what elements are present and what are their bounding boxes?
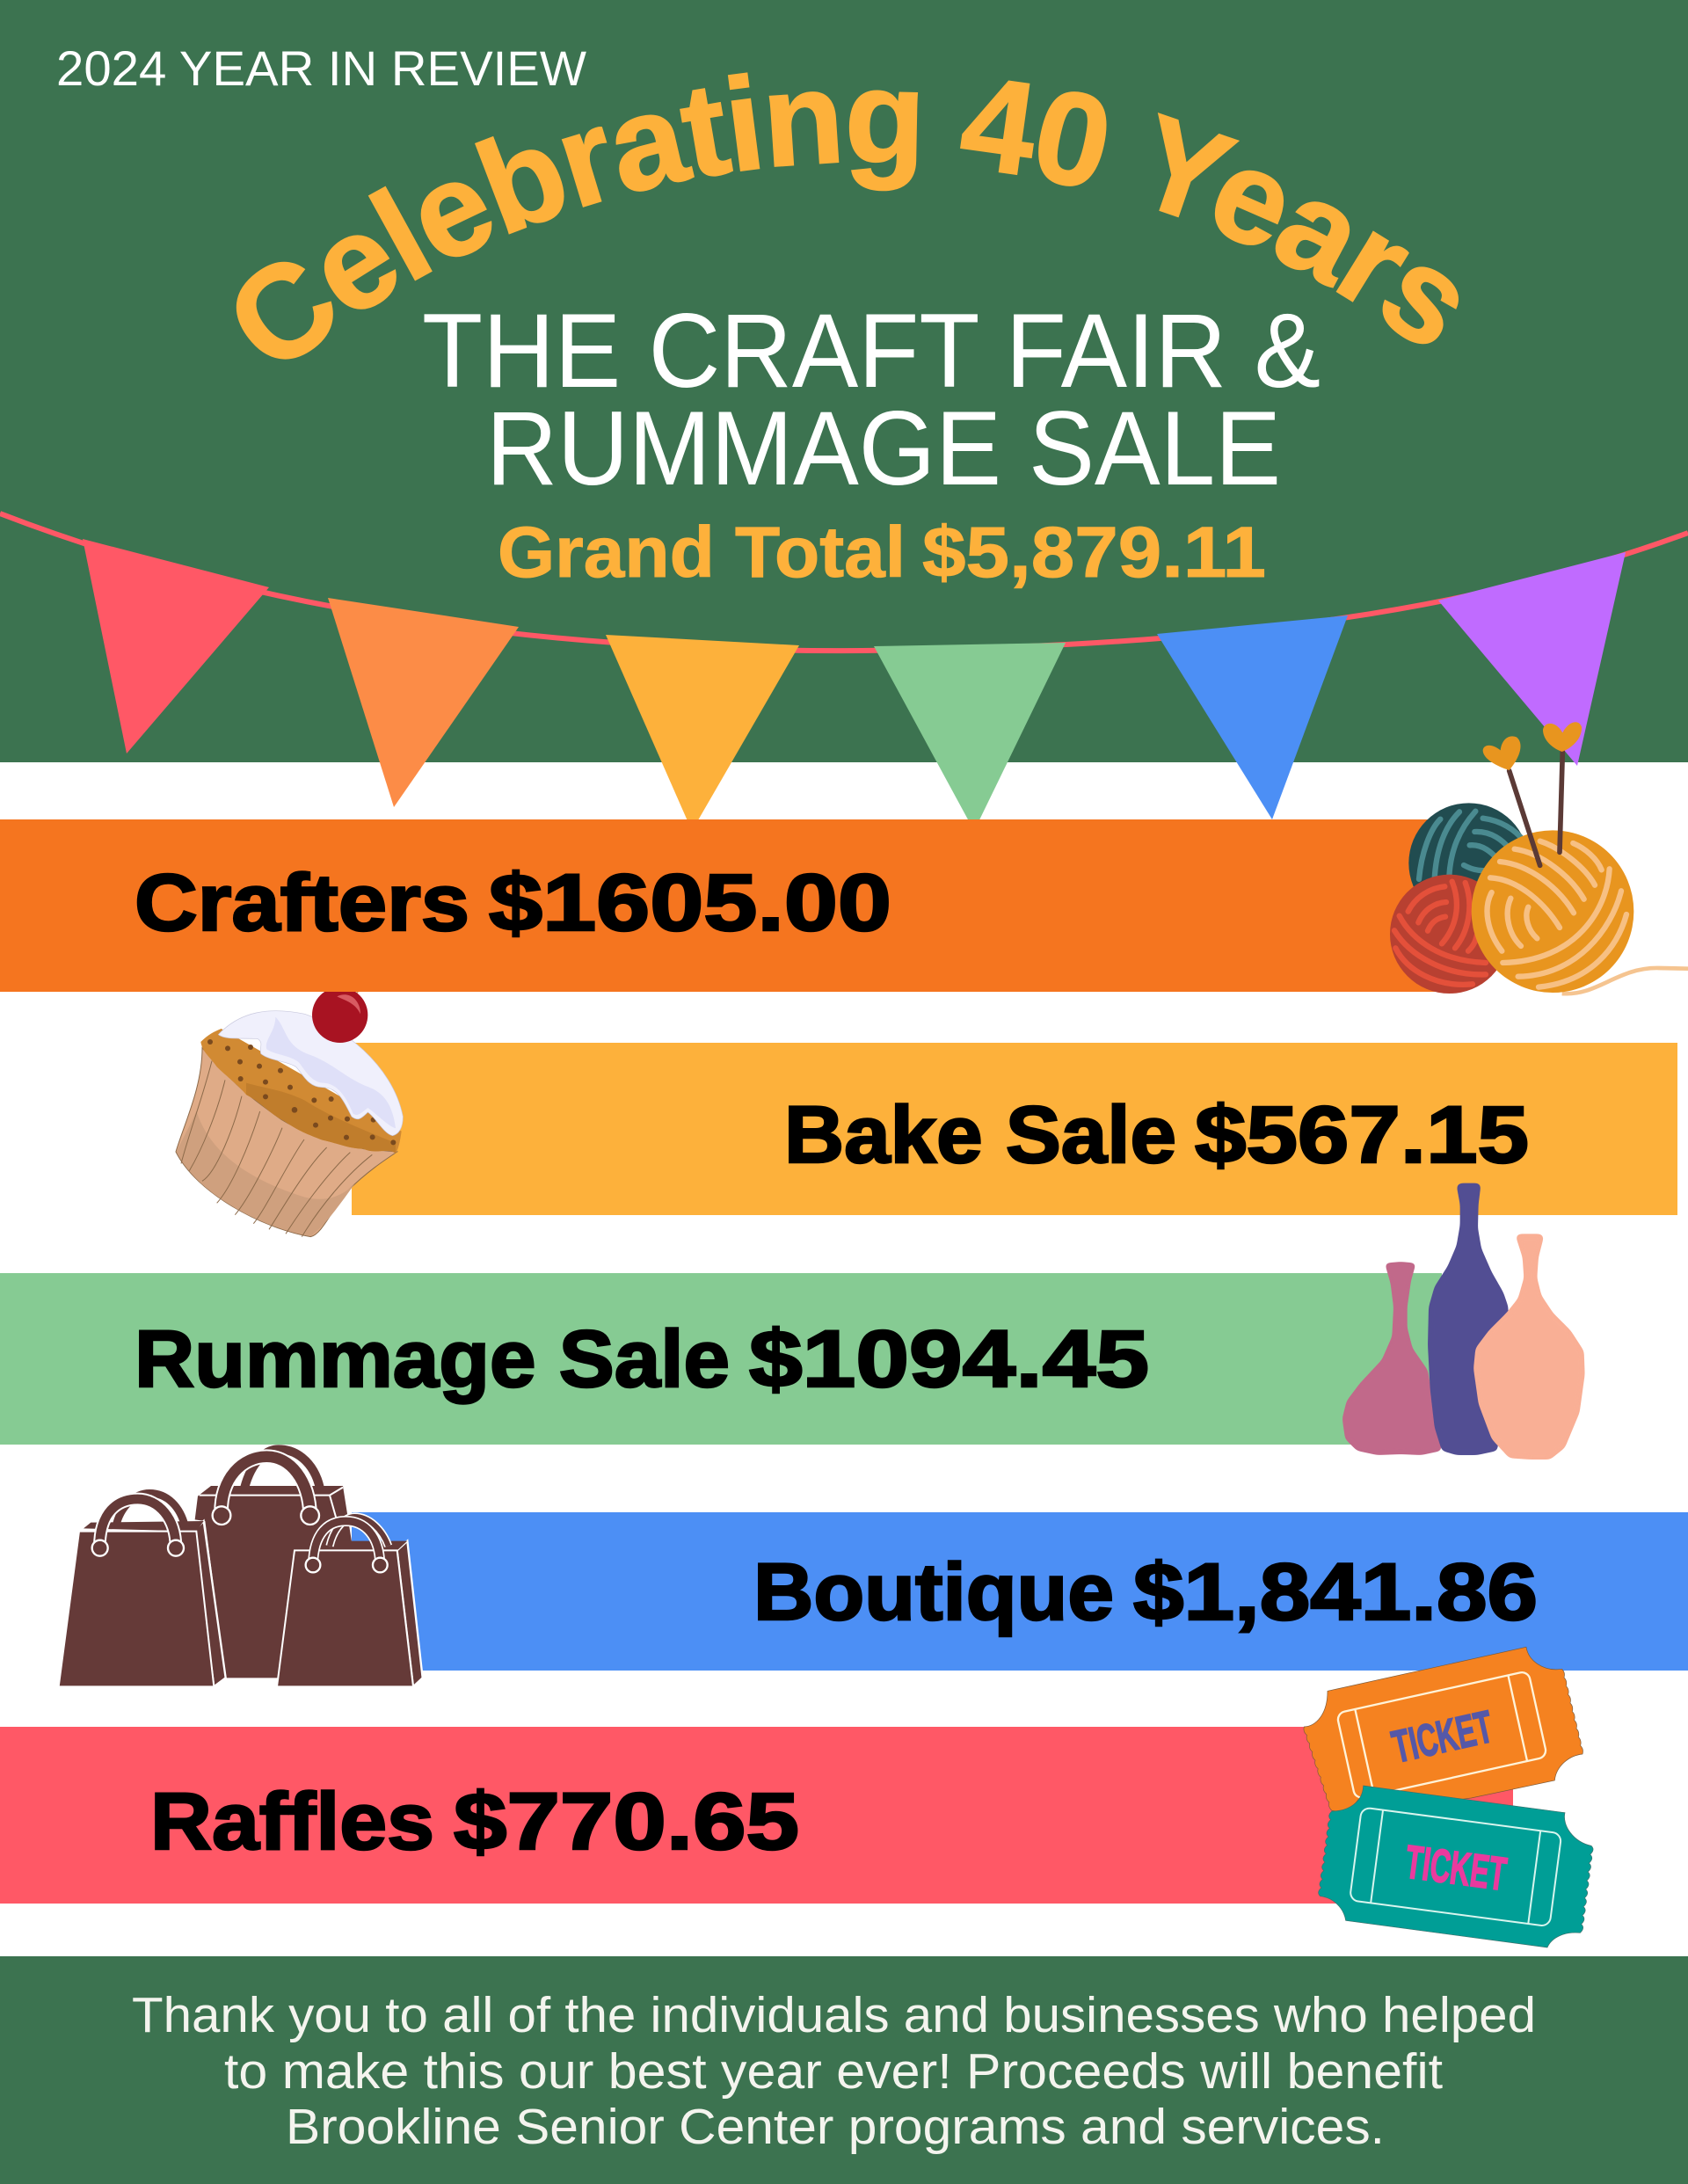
label: rummage sale: Rummage Sale xyxy=(135,1314,730,1404)
purple bottle xyxy=(1428,1183,1509,1455)
cupcake wrapper xyxy=(176,1048,397,1237)
title: craft fair and rummage sale xyxy=(422,292,1321,507)
label: raffles: $770.65 xyxy=(454,1777,799,1867)
peach vase xyxy=(1473,1234,1585,1460)
label: rummage sale xyxy=(135,1314,1149,1404)
text: grand total xyxy=(498,513,1266,593)
label: rummage sale: $1094.45 xyxy=(749,1314,1149,1404)
text: thank you message: to make this our best year ever! Proceeds will benefit xyxy=(224,2043,1443,2100)
teal ticket xyxy=(1319,1786,1593,1947)
title: celebrating 40 years: Celebrating 40 Years xyxy=(236,72,1459,360)
knitting needles xyxy=(1510,752,1562,865)
icon: yarn balls xyxy=(1390,722,1688,994)
flag: blue xyxy=(1157,615,1348,819)
text: thank you message xyxy=(132,1987,1536,2155)
label: raffles xyxy=(150,1777,799,1867)
label: crafters xyxy=(135,858,891,948)
left bag xyxy=(59,1493,226,1686)
text: year in review: 2024 YEAR IN REVIEW xyxy=(56,40,586,96)
bar: boutique xyxy=(352,1512,1688,1671)
label: boutique: $1,841.86 xyxy=(1133,1547,1538,1637)
flag: purple xyxy=(1438,552,1626,766)
yarn tail xyxy=(1562,968,1688,994)
ticket label: TICKET xyxy=(1402,1836,1510,1901)
label: bake sale: $567.15 xyxy=(1195,1090,1529,1180)
bar: rummage sale xyxy=(0,1273,1442,1445)
icon: shopping bags xyxy=(59,1449,423,1686)
cherry xyxy=(312,987,367,1043)
flag: yellow xyxy=(606,635,799,831)
label: crafters: Crafters xyxy=(135,858,469,948)
panel: footer background xyxy=(0,1956,1688,2184)
label: boutique xyxy=(753,1547,1538,1637)
label: bake sale: Bake Sale xyxy=(784,1090,1176,1180)
text: grand total: $5,879.11 xyxy=(922,513,1266,593)
bar: crafters xyxy=(0,819,1459,992)
orange ticket xyxy=(1304,1647,1582,1811)
panel: header background xyxy=(0,0,1688,762)
right bag xyxy=(277,1517,423,1686)
icon: cupcake xyxy=(176,987,403,1237)
label: bake sale xyxy=(784,1090,1529,1180)
flag: orange xyxy=(328,598,519,807)
text: thank you message: Thank you to all of the individuals and businesses who helped xyxy=(132,1987,1536,2043)
bar: raffles xyxy=(0,1727,1513,1904)
icing xyxy=(218,1011,403,1136)
pink vase xyxy=(1342,1262,1442,1455)
bar: bake sale xyxy=(352,1043,1677,1215)
label: crafters: $1605.00 xyxy=(489,858,891,948)
needle hearts xyxy=(1483,722,1582,770)
text: thank you message: Brookline Senior Center programs and services. xyxy=(286,2099,1385,2155)
red yarn ball xyxy=(1390,875,1509,994)
orange yarn ball xyxy=(1472,830,1633,993)
bunting banner xyxy=(0,513,1688,831)
flag: red xyxy=(83,539,269,753)
ticket label: TICKET xyxy=(1387,1700,1497,1773)
icon: tickets xyxy=(1304,1647,1593,1947)
label: boutique: Boutique xyxy=(753,1547,1114,1637)
muffin top xyxy=(200,1029,402,1154)
title: craft fair and rummage sale: THE CRAFT FAIR & xyxy=(422,292,1321,410)
flag: green xyxy=(874,643,1066,831)
icon: vases xyxy=(1342,1183,1585,1460)
teal yarn ball xyxy=(1408,803,1529,923)
text: grand total: Grand Total xyxy=(498,513,906,593)
middle bag xyxy=(195,1449,354,1678)
label: raffles: Raffles xyxy=(150,1777,434,1867)
cupcake raisins xyxy=(207,1039,396,1145)
title: craft fair and rummage sale: RUMMAGE SALE xyxy=(486,389,1281,507)
